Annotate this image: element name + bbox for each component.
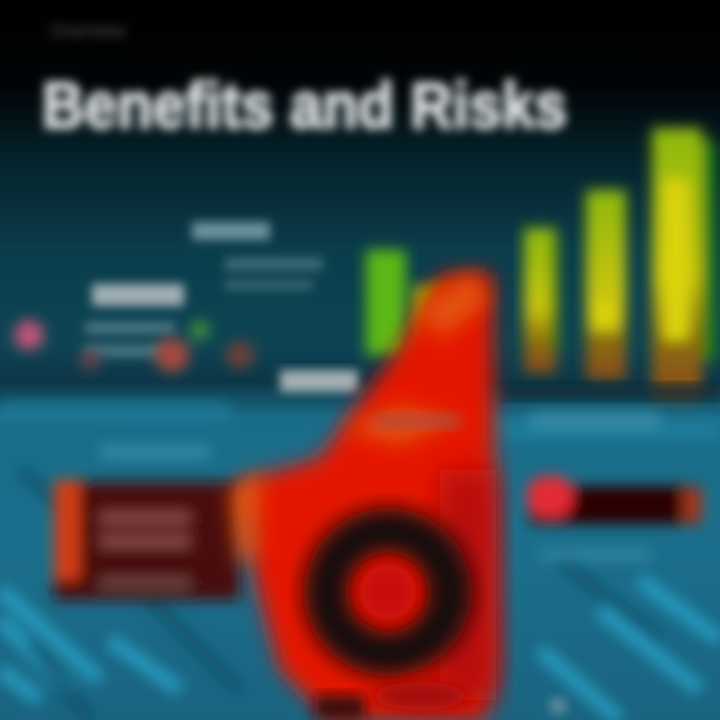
text block: upper label bbox=[192, 222, 323, 290]
text hint bbox=[375, 414, 460, 428]
bar 2 bbox=[412, 285, 452, 355]
bar 4 bbox=[586, 190, 626, 380]
shaded darker right side bbox=[440, 470, 496, 700]
bar chart: green and yellow bars bbox=[366, 128, 716, 398]
bar 1 bbox=[366, 250, 406, 355]
red warning mass bbox=[240, 272, 496, 720]
text block: center label bbox=[280, 370, 358, 392]
floor circuit pattern bbox=[0, 410, 720, 720]
small heading: Overview bbox=[50, 21, 126, 41]
dark ring icon bbox=[326, 530, 450, 654]
ring bbox=[326, 530, 450, 654]
dark band below the bars bbox=[500, 385, 720, 399]
main red shape bbox=[230, 272, 496, 720]
orange highlights bbox=[230, 272, 490, 560]
ring centre bbox=[360, 564, 416, 620]
pink marker bbox=[14, 320, 44, 350]
lower red dark tail bbox=[374, 682, 466, 710]
orange marker bbox=[226, 341, 254, 369]
panel: right red card bbox=[527, 476, 702, 524]
text block: left label bbox=[85, 284, 184, 357]
text block: lower labels bbox=[100, 412, 660, 560]
bar 5 bbox=[652, 128, 716, 398]
panel: left red card bbox=[54, 480, 240, 600]
small bottom icon bbox=[549, 697, 567, 715]
small dots row bbox=[14, 320, 254, 372]
bar 3 bbox=[524, 228, 560, 373]
title: Benefits and Risks bbox=[42, 68, 567, 142]
red marker bbox=[155, 338, 189, 372]
green marker bbox=[191, 321, 209, 339]
